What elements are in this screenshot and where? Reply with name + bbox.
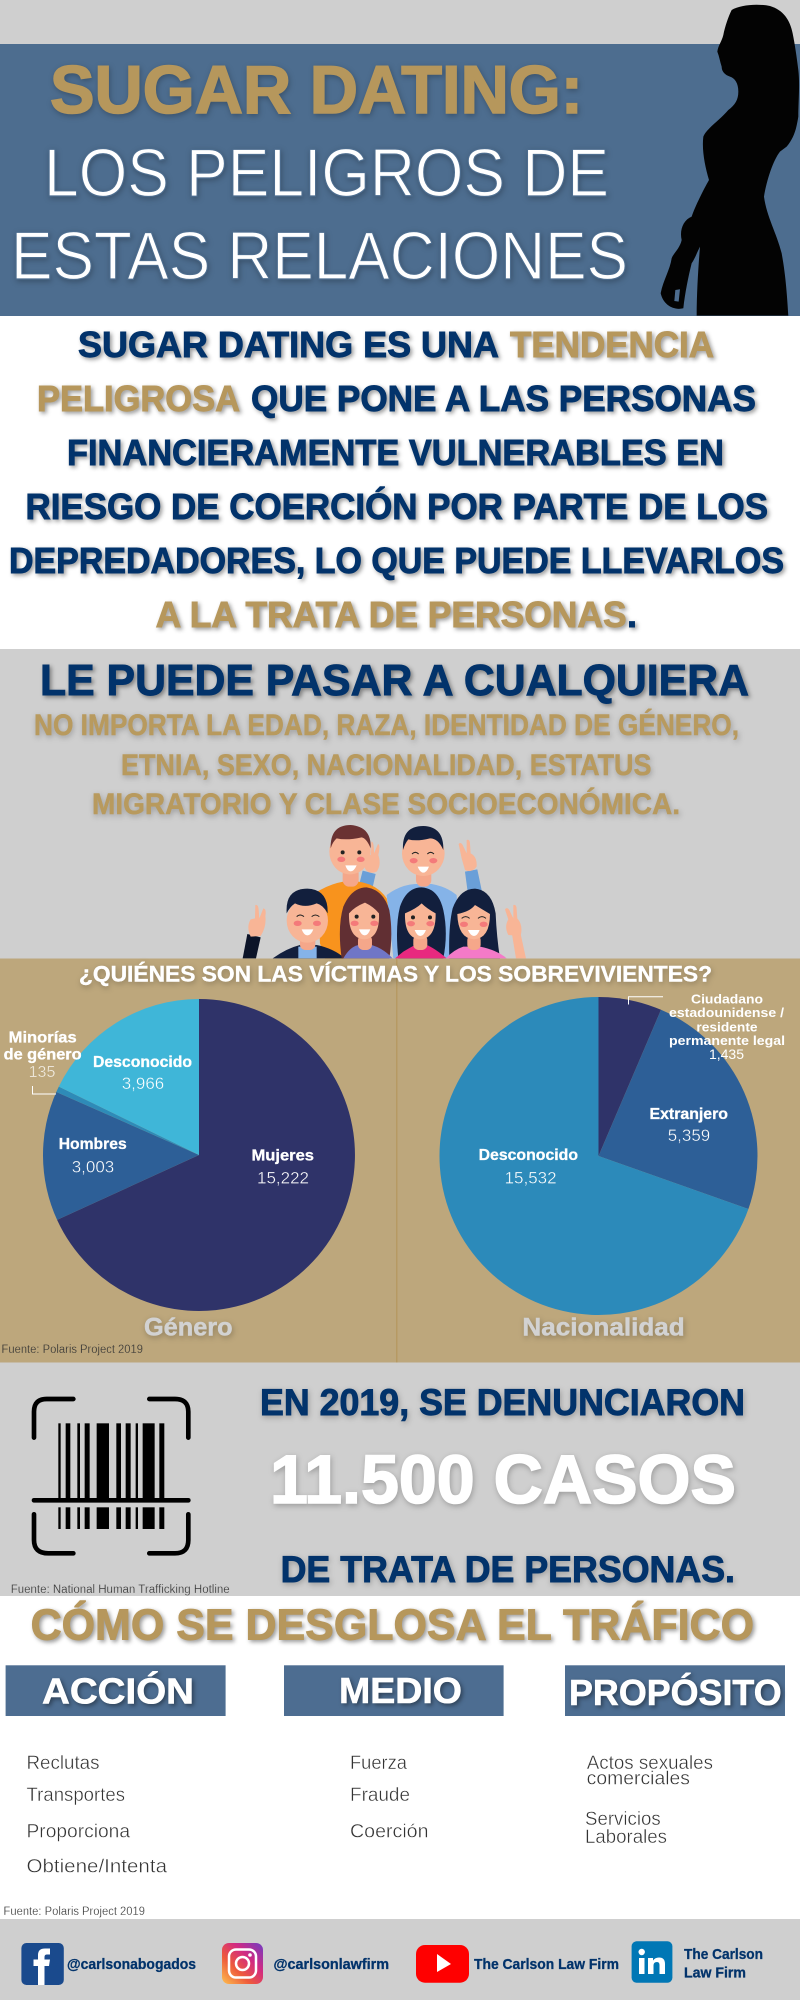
panel: intro statement (9, 324, 784, 635)
text: line 1: SUGAR DATING ES UNA (78, 324, 499, 365)
column: accion: Transportes (26, 1785, 125, 1806)
label: desconocido: Desconocido (479, 1147, 578, 1164)
label: mujeres (252, 1148, 314, 1188)
text: subtitle (34, 708, 739, 821)
panel: le puede pasar a cualquiera (0, 649, 800, 959)
girl navy (397, 887, 446, 958)
left boy: arm and jacket (243, 934, 261, 958)
chart: gender pie (4, 999, 355, 1342)
label: minorias de genero: Minorías (9, 1030, 77, 1046)
column: accion: Reclutas (26, 1753, 100, 1774)
column: proposito: Servicios (585, 1809, 661, 1830)
panel: victims and survivors (0, 958, 800, 1362)
title: los peligros de: LOS PELIGROS DE (44, 135, 609, 211)
heading: CÓMO SE DESGLOSA EL TRÁFICO (31, 1600, 754, 1650)
source note: Fuente: Polaris Project 2019 (2, 1344, 143, 1356)
slice: desconocido (439, 997, 748, 1315)
title: estas relaciones: ESTAS RELACIONES (11, 218, 628, 294)
panel: trafficking breakdown (4, 1600, 785, 1918)
label: hombres (59, 1136, 127, 1176)
slice: hombres (43, 1092, 199, 1220)
column: medio: Coerción (350, 1822, 428, 1842)
text: line 6: A LA TRATA DE PERSONAS (156, 594, 627, 635)
panel: social footer (0, 1919, 800, 2000)
text: line 1: TENDENCIA (510, 324, 714, 365)
title: sugar dating: SUGAR DATING: (50, 52, 583, 128)
icon: group of people (243, 825, 526, 958)
slice: desconocido (59, 999, 199, 1155)
slice: minorias (56, 1087, 199, 1155)
label: ciudadano: residente (696, 1020, 758, 1034)
slice: extranjero (598, 1010, 757, 1209)
column: proposito: comerciales (587, 1768, 690, 1790)
back heads (343, 867, 359, 887)
label: mujeres: 15,222 (257, 1168, 309, 1188)
label: ciudadano (628, 992, 785, 1062)
label: linkedin name: The Carlson (684, 1946, 763, 1963)
column: accion (6, 1665, 226, 1878)
label: linkedin name: Law Firm (684, 1965, 746, 1982)
icon: linkedin (632, 1941, 672, 1983)
label: hombres: 3,003 (72, 1158, 114, 1176)
label: ciudadano: Ciudadano (691, 992, 763, 1006)
label: desconocido: 3,966 (122, 1074, 164, 1093)
back shirts (317, 882, 392, 958)
label: ciudadano: estadounidense / (669, 1005, 784, 1020)
icon: barcode (34, 1399, 188, 1553)
text: line 1 (78, 324, 714, 365)
panel: header (0, 0, 800, 316)
column: proposito: Actos sexuales (587, 1753, 713, 1774)
slice: ciudadano (598, 997, 661, 1156)
label: extranjero: 5,359 (668, 1126, 710, 1145)
label: minorias de genero: de género (4, 1046, 82, 1064)
chart title: nacionalidad: Nacionalidad (522, 1314, 685, 1342)
label: youtube channel: The Carlson Law Firm (474, 1956, 619, 1973)
chart: nationality pie (439, 992, 785, 1342)
heading: LE PUEDE PASAR A CUALQUIERA (40, 656, 749, 705)
label: ciudadano: 1,435 (709, 1046, 744, 1062)
girl navy right: arm (512, 934, 526, 958)
label: minorias de genero (4, 1030, 82, 1094)
label: minorias de genero: 135 (29, 1064, 55, 1081)
icon: youtube (416, 1945, 469, 1983)
icon: facebook (21, 1943, 64, 1985)
text: line 3: FINANCIERAMENTE VULNERABLES EN (67, 432, 724, 473)
column: proposito: PROPÓSITO (569, 1671, 782, 1713)
column: medio: MEDIO (339, 1670, 462, 1711)
slice: mujeres (57, 999, 355, 1311)
column: accion: Obtiene/Intenta (26, 1857, 167, 1878)
heading: ¿QUIÉNES SON LAS VÍCTIMAS Y LOS SOBREVIVIENTES? (79, 962, 712, 986)
text: line 2: PELIGROSA (37, 378, 240, 419)
source note: Fuente: Polaris Project 2019 (4, 1906, 145, 1918)
stat: 11.500 casos: 11.500 CASOS (270, 1441, 736, 1518)
column: medio: Fraude (350, 1785, 410, 1806)
label: extranjero: Extranjero (650, 1106, 728, 1123)
label: mujeres: Mujeres (252, 1148, 314, 1165)
column: accion: Proporciona (26, 1822, 130, 1842)
column: medio: Fuerza (350, 1753, 407, 1774)
label: facebook handle: @carlsonabogados (67, 1956, 196, 1973)
label: desconocido: 15,532 (505, 1168, 557, 1188)
text: en 2019 se denunciaron: EN 2019, SE DENUNCIARON (260, 1382, 745, 1423)
column: proposito (565, 1665, 785, 1848)
text: subtitle: MIGRATORIO Y CLASE SOCIOECONÓMICA. (92, 787, 680, 821)
text: line 2 (37, 378, 756, 419)
back faces (341, 850, 345, 854)
column: accion: ACCIÓN (42, 1670, 194, 1712)
text: de trata de personas: DE TRATA DE PERSONAS. (281, 1549, 735, 1590)
label: linkedin name (684, 1946, 763, 1982)
text: subtitle: ETNIA, SEXO, NACIONALIDAD, ESTATUS (121, 749, 652, 782)
icon: instagram (222, 1943, 263, 1984)
text: line 2: QUE PONE A LAS PERSONAS (251, 378, 756, 419)
label: instagram handle: @carlsonlawfirm (274, 1956, 389, 1973)
label: hombres: Hombres (59, 1136, 127, 1153)
text: line 4: RIESGO DE COERCIÓN POR PARTE DE LOS (26, 485, 768, 527)
panel: reported cases (0, 1362, 800, 1596)
label: desconocido: Desconocido (93, 1054, 192, 1071)
girl brown (340, 887, 391, 958)
column: proposito: Laborales (585, 1827, 667, 1848)
column: medio (284, 1665, 504, 1842)
back right arm (465, 869, 482, 897)
label: ciudadano: permanente legal (669, 1033, 785, 1048)
label: desconocido (479, 1147, 578, 1188)
label: extranjero (650, 1106, 728, 1145)
icon: woman silhouette (661, 5, 799, 316)
source note: Fuente: National Human Trafficking Hotline (11, 1584, 230, 1596)
text: line 6: . (627, 594, 637, 635)
label: desconocido (93, 1054, 192, 1093)
back left hand and arm (359, 871, 376, 887)
chart title: genero: Género (144, 1314, 233, 1342)
